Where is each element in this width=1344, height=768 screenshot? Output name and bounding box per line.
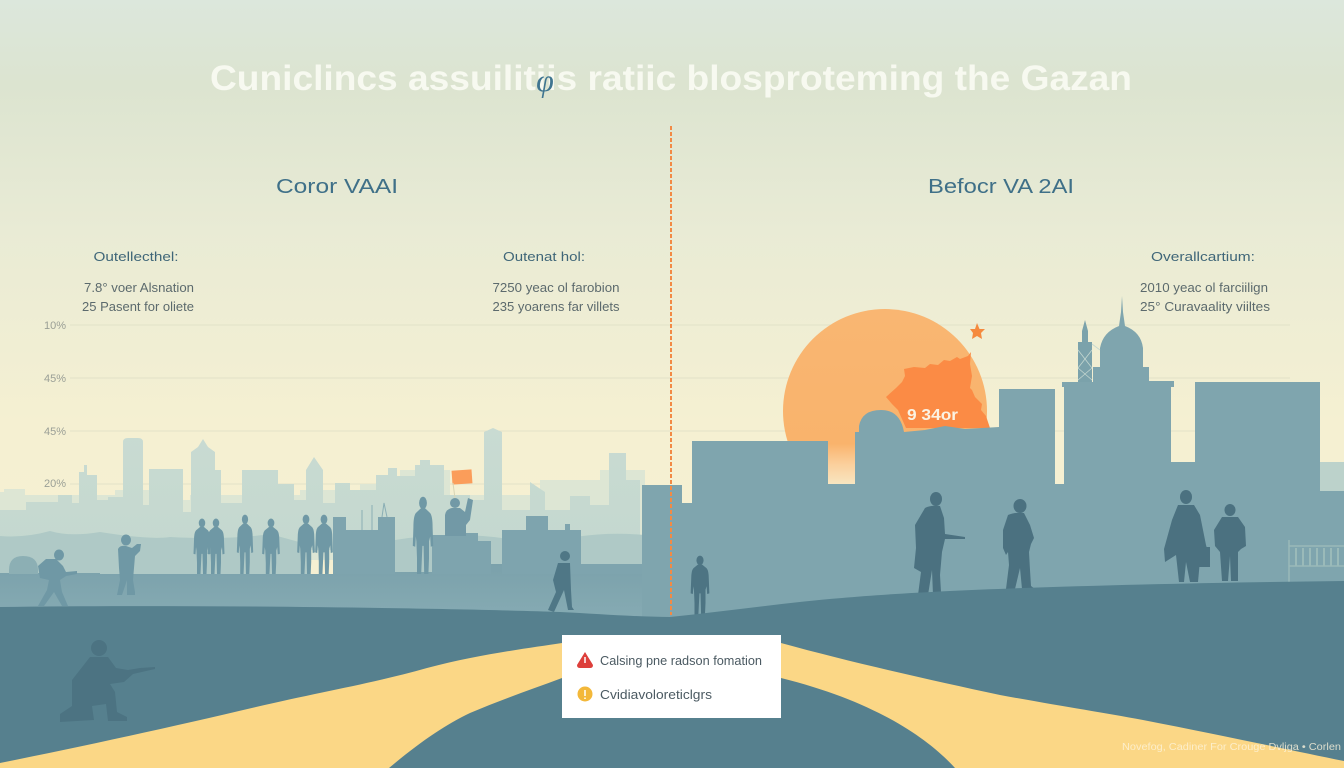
text block: middle stats: Outenat hol: bbox=[503, 249, 585, 264]
text block: middle stats bbox=[492, 249, 620, 314]
person: photographer bbox=[117, 534, 141, 595]
mid ground: left terrace bbox=[0, 564, 642, 625]
back skyline layer: pale bbox=[0, 470, 645, 560]
person: walker 5 bbox=[297, 515, 315, 574]
text block: right stats: 2010 yeac ol farciilign bbox=[1140, 280, 1268, 295]
person: soldier with backpack bbox=[38, 550, 77, 606]
chart axis: gridlines and percent labels: 10% bbox=[44, 320, 66, 332]
person: walker 2 bbox=[208, 519, 224, 574]
callout text: first line: Calsing pne radson fomation bbox=[600, 654, 762, 668]
text block: middle stats: 7250 yeac ol farobion bbox=[492, 280, 620, 295]
text block: middle stats: 235 yoarens far villets bbox=[492, 299, 620, 314]
title: Cuniclincs assuilitiis ratiic blosproteming the Gazan bbox=[210, 59, 1132, 98]
fence bbox=[1289, 540, 1344, 582]
sun bbox=[783, 309, 987, 513]
yellow road bbox=[0, 643, 1344, 768]
person: walker 3 bbox=[237, 515, 253, 574]
people: left crowd bbox=[38, 497, 433, 606]
text block: left stats: 25 Pasent for oliete bbox=[82, 299, 194, 314]
heading: right side: Befocr VA 2AI bbox=[928, 175, 1074, 198]
person: walker 6 bbox=[315, 515, 333, 574]
chart axis: gridlines and percent labels: 45% bbox=[44, 373, 66, 385]
far hills: left side bbox=[0, 531, 645, 580]
chart axis: gridlines and percent labels bbox=[44, 320, 1290, 490]
person: tall standing figure bbox=[413, 497, 433, 574]
orange map region bbox=[886, 352, 990, 428]
person: walker 1 bbox=[194, 519, 210, 574]
right skyline buildings bbox=[642, 296, 1344, 640]
callout card bbox=[562, 635, 781, 718]
person: with gun bbox=[914, 492, 965, 595]
people: right group bbox=[914, 490, 1246, 595]
person: with briefcase bbox=[1164, 490, 1210, 582]
person: standing bbox=[1003, 499, 1035, 589]
dome: left side bbox=[9, 556, 38, 574]
kneeling soldier bbox=[60, 640, 155, 722]
icon: red warning bbox=[577, 652, 593, 668]
dashed divider bbox=[670, 126, 672, 615]
mid buildings: left side bbox=[333, 516, 642, 574]
person: foreground walker bbox=[548, 551, 574, 612]
text block: right stats bbox=[1140, 249, 1271, 314]
person: walker 4 bbox=[262, 519, 280, 574]
chart axis: gridlines and percent labels: 45% bbox=[44, 426, 66, 438]
icon: yellow caution bbox=[578, 686, 592, 702]
tower: right skyline bbox=[1078, 320, 1100, 382]
person: companion bbox=[1214, 504, 1246, 581]
person with flag bbox=[445, 469, 473, 536]
text block: right stats: Overallcartium: bbox=[1151, 249, 1255, 264]
callout text: second line: Cvidiavoloreticlgrs bbox=[600, 688, 712, 702]
far skyline: left city bbox=[0, 428, 640, 550]
text block: left stats: Outellecthel: bbox=[94, 249, 178, 264]
star bbox=[970, 323, 985, 339]
pale building: far right bbox=[1320, 462, 1344, 502]
person: centre figure bbox=[691, 556, 709, 615]
text block: left stats: 7.8° voer Alsnation bbox=[84, 280, 194, 295]
text block: left stats bbox=[82, 249, 194, 314]
chart axis: gridlines and percent labels: 20% bbox=[44, 478, 66, 490]
title: φ bbox=[536, 62, 554, 98]
map value label: 9 34or bbox=[907, 407, 958, 424]
footer credit: Novefog, Cadiner For Crouge Dvljga • Corlen bbox=[1122, 742, 1341, 753]
heading: left side: Coror VAAI bbox=[276, 175, 398, 198]
ground bbox=[0, 581, 1344, 768]
antenna detail: left rooftops bbox=[362, 503, 387, 530]
text block: right stats: 25° Curavaality viiltes bbox=[1140, 299, 1271, 314]
